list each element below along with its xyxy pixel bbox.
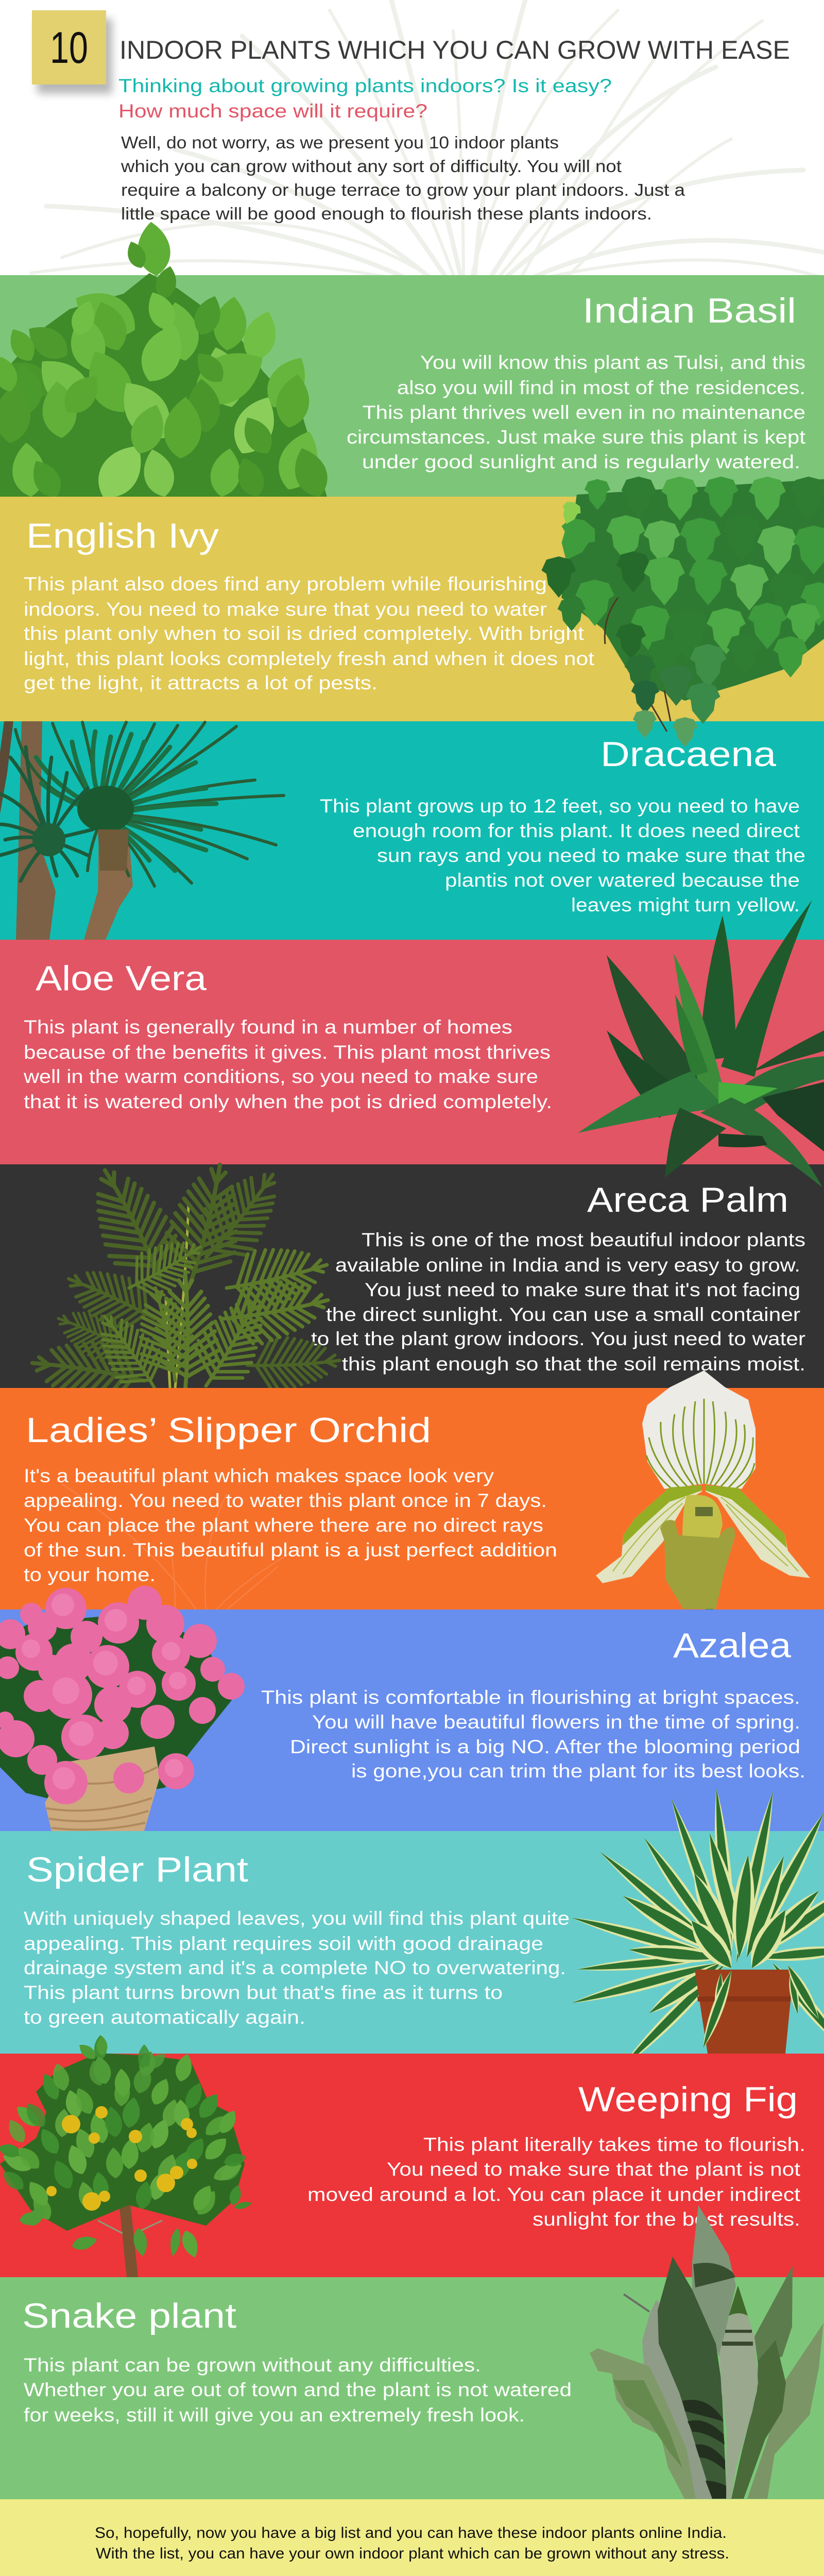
panel: Dracaena <box>0 721 824 940</box>
heading: Spider Plant: Spider Plant <box>26 1850 248 1889</box>
intro text: require a balcony or huge terrace to grow your plant indoors. Just a <box>121 180 685 199</box>
text: Snake plant: This plant can be grown without any difficulties. <box>24 2354 481 2376</box>
panel: Spider Plant <box>0 1831 824 2054</box>
text: English Ivy: This plant also does find any problem while flourishing <box>24 573 547 595</box>
text: Weeping Fig <box>307 2134 805 2230</box>
text: Indian Basil: This plant thrives well even in no maintenance <box>363 402 805 423</box>
intro text: which you can grow without any sort of difficulty. You will not <box>121 157 622 176</box>
text: Aloe Vera: This plant is generally found in a number of homes <box>24 1016 512 1038</box>
text: Areca Palm: the direct sunlight. You can use a small container <box>326 1304 800 1325</box>
text: Ladies' Slipper Orchid <box>24 1465 557 1585</box>
text: Dracaena: sun rays and you need to make sure that the <box>377 845 805 866</box>
title: INDOOR PLANTS WHICH YOU CAN GROW WITH EASE <box>119 36 790 64</box>
text: Weeping Fig: You need to make sure that the plant is not <box>387 2159 801 2180</box>
heading: Dracaena: Dracaena <box>600 735 776 774</box>
text: Aloe Vera: that it is watered only when the pot is dried completely. <box>24 1091 552 1112</box>
text: Dracaena: This plant grows up to 12 feet, so you need to have <box>320 795 800 817</box>
text: Spider Plant: With uniquely shaped leaves, you will find this plant quite <box>24 1908 570 1929</box>
tree fruits <box>46 2106 197 2211</box>
text: Aloe Vera: well in the warm conditions, so you need to make sure <box>23 1066 538 1087</box>
icon: dracaena <box>0 721 284 940</box>
panel: closing note: With the list, you can have your own indoor plant which can be grown without any stress. <box>96 2545 729 2562</box>
heading: Azalea: Azalea <box>673 1626 791 1665</box>
text: Snake plant: Whether you are out of town and the plant is not watered <box>24 2379 572 2400</box>
text: Areca Palm: this plant enough so that the soil remains moist. <box>342 1353 805 1375</box>
text: Ladies' Slipper Orchid: to your home. <box>24 1564 156 1585</box>
icon: slipper orchid <box>596 1370 810 1609</box>
panel: English Ivy <box>0 497 824 721</box>
text: Ladies' Slipper Orchid: of the sun. This beautiful plant is a just perfect addition <box>24 1539 557 1561</box>
intro text: Well, do not worry, as we present you 10 indoor plants <box>121 133 559 152</box>
text: Azalea: You will have beautiful flowers in the time of spring. <box>312 1711 800 1733</box>
text: Azalea <box>261 1687 805 1782</box>
panel: Snake plant <box>0 2277 824 2499</box>
heading: Aloe Vera: Aloe Vera <box>36 959 207 998</box>
text: Dracaena: leaves might turn yellow. <box>571 894 800 916</box>
heading: Indian Basil: Indian Basil <box>582 291 796 330</box>
text: Spider Plant <box>24 1908 570 2028</box>
text: Areca Palm <box>311 1229 805 1375</box>
text: Spider Plant: This plant turns brown but that's fine as it turns to <box>24 1982 503 2003</box>
text: Indian Basil: also you will find in most of the residences. <box>397 377 805 398</box>
subtitle questions <box>118 75 612 122</box>
text: Dracaena: plantis not over watered because the <box>445 870 800 891</box>
text: Spider Plant: drainage system and it's a complete NO to overwatering. <box>24 1957 566 1978</box>
text: Indian Basil: circumstances. Just make sure this plant is kept <box>347 427 806 448</box>
text: Snake plant: for weeks, still it will give you an extremely fresh look. <box>24 2404 525 2426</box>
text: English Ivy <box>24 573 595 693</box>
azalea flowers <box>0 1586 245 1804</box>
panel: Indian Basil <box>0 275 824 497</box>
text: English Ivy: light, this plant looks completely fresh and when it does not <box>24 648 595 669</box>
heading: Ladies' Slipper Orchid: Ladies’ Slipper Orchid <box>26 1411 431 1450</box>
text: Dracaena: enough room for this plant. It does need direct <box>353 820 800 841</box>
panel: closing note <box>0 2499 824 2576</box>
faint grass <box>62 1484 304 1609</box>
icon: areca palm <box>30 1162 341 1388</box>
text: Areca Palm: available online in India and is very easy to grow. <box>335 1255 800 1276</box>
text: Areca Palm: You just need to make sure that it's not facing <box>365 1279 800 1300</box>
text: Spider Plant: appealing. This plant requires soil with good drainage <box>24 1933 543 1954</box>
text: Azalea: Direct sunlight is a big NO. After the blooming period <box>290 1736 800 1757</box>
text: Indian Basil: under good sunlight and is regularly watered. <box>362 451 800 472</box>
text: Azalea: is gone,you can trim the plant for its best looks. <box>351 1760 805 1782</box>
text: Dracaena <box>320 795 805 916</box>
icon: weeping fig tree <box>0 2035 252 2277</box>
icon: spider plant <box>570 1788 824 2073</box>
text: Azalea: This plant is comfortable in flourishing at bright spaces. <box>261 1687 800 1708</box>
text: Ladies' Slipper Orchid: You can place the plant where there are no direct rays <box>24 1515 543 1536</box>
text: Weeping Fig: This plant literally takes time to flourish. <box>423 2134 805 2155</box>
heading: Snake plant: Snake plant <box>22 2296 236 2335</box>
heading: Areca Palm: Areca Palm <box>587 1180 788 1219</box>
text: Ladies' Slipper Orchid: It's a beautiful plant which makes space look very <box>24 1465 494 1486</box>
number badge <box>32 10 112 94</box>
text: English Ivy: get the light, it attracts a lot of pests. <box>24 672 377 693</box>
subtitle questions: Thinking about growing plants indoors? Is it easy? <box>118 75 612 96</box>
icon: basil plant <box>0 220 334 507</box>
icon: snake plant <box>590 2205 823 2499</box>
text: Aloe Vera <box>23 1016 552 1112</box>
text: English Ivy: this plant only when to soil is dried completely. With bright <box>24 623 585 644</box>
panel: Aloe Vera <box>0 940 824 1164</box>
heading: Weeping Fig: Weeping Fig <box>578 2080 798 2119</box>
panel: closing note: So, hopefully, now you have a big list and you can have these indoor plants online India. <box>95 2524 727 2541</box>
text: Snake plant <box>24 2354 572 2426</box>
text: Weeping Fig: sunlight for the best results. <box>533 2209 800 2230</box>
text: Indian Basil <box>347 352 806 472</box>
background grass <box>31 0 824 289</box>
text: English Ivy: indoors. You need to make sure that you need to water <box>24 599 547 620</box>
header panel <box>0 0 824 289</box>
icon: azalea pot <box>0 1586 245 1831</box>
intro text: little space will be good enough to flourish these plants indoors. <box>121 204 652 223</box>
icon: english ivy <box>541 477 824 747</box>
text: Ladies' Slipper Orchid: appealing. You need to water this plant once in 7 days. <box>24 1490 547 1511</box>
heading: English Ivy: English Ivy <box>26 516 219 555</box>
panel: Weeping Fig <box>0 2054 824 2277</box>
panel: Azalea <box>0 1609 824 1831</box>
icon: aloe vera <box>578 900 824 1188</box>
text: Weeping Fig: moved around a lot. You can place it under indirect <box>307 2184 801 2205</box>
text: Indian Basil: You will know this plant as Tulsi, and this <box>420 352 805 373</box>
text: Spider Plant: to green automatically again. <box>24 2007 305 2028</box>
panel: Areca Palm <box>0 1164 824 1388</box>
text: Areca Palm: to let the plant grow indoors. You just need to water <box>311 1328 805 1349</box>
intro text <box>121 133 685 223</box>
text: Aloe Vera: because of the benefits it gives. This plant most thrives <box>24 1042 551 1063</box>
number badge: 10 <box>50 23 88 73</box>
panel: Ladies' Slipper Orchid <box>0 1388 824 1609</box>
subtitle questions: How much space will it require? <box>118 100 427 122</box>
text: Areca Palm: This is one of the most beautiful indoor plants <box>362 1229 805 1250</box>
